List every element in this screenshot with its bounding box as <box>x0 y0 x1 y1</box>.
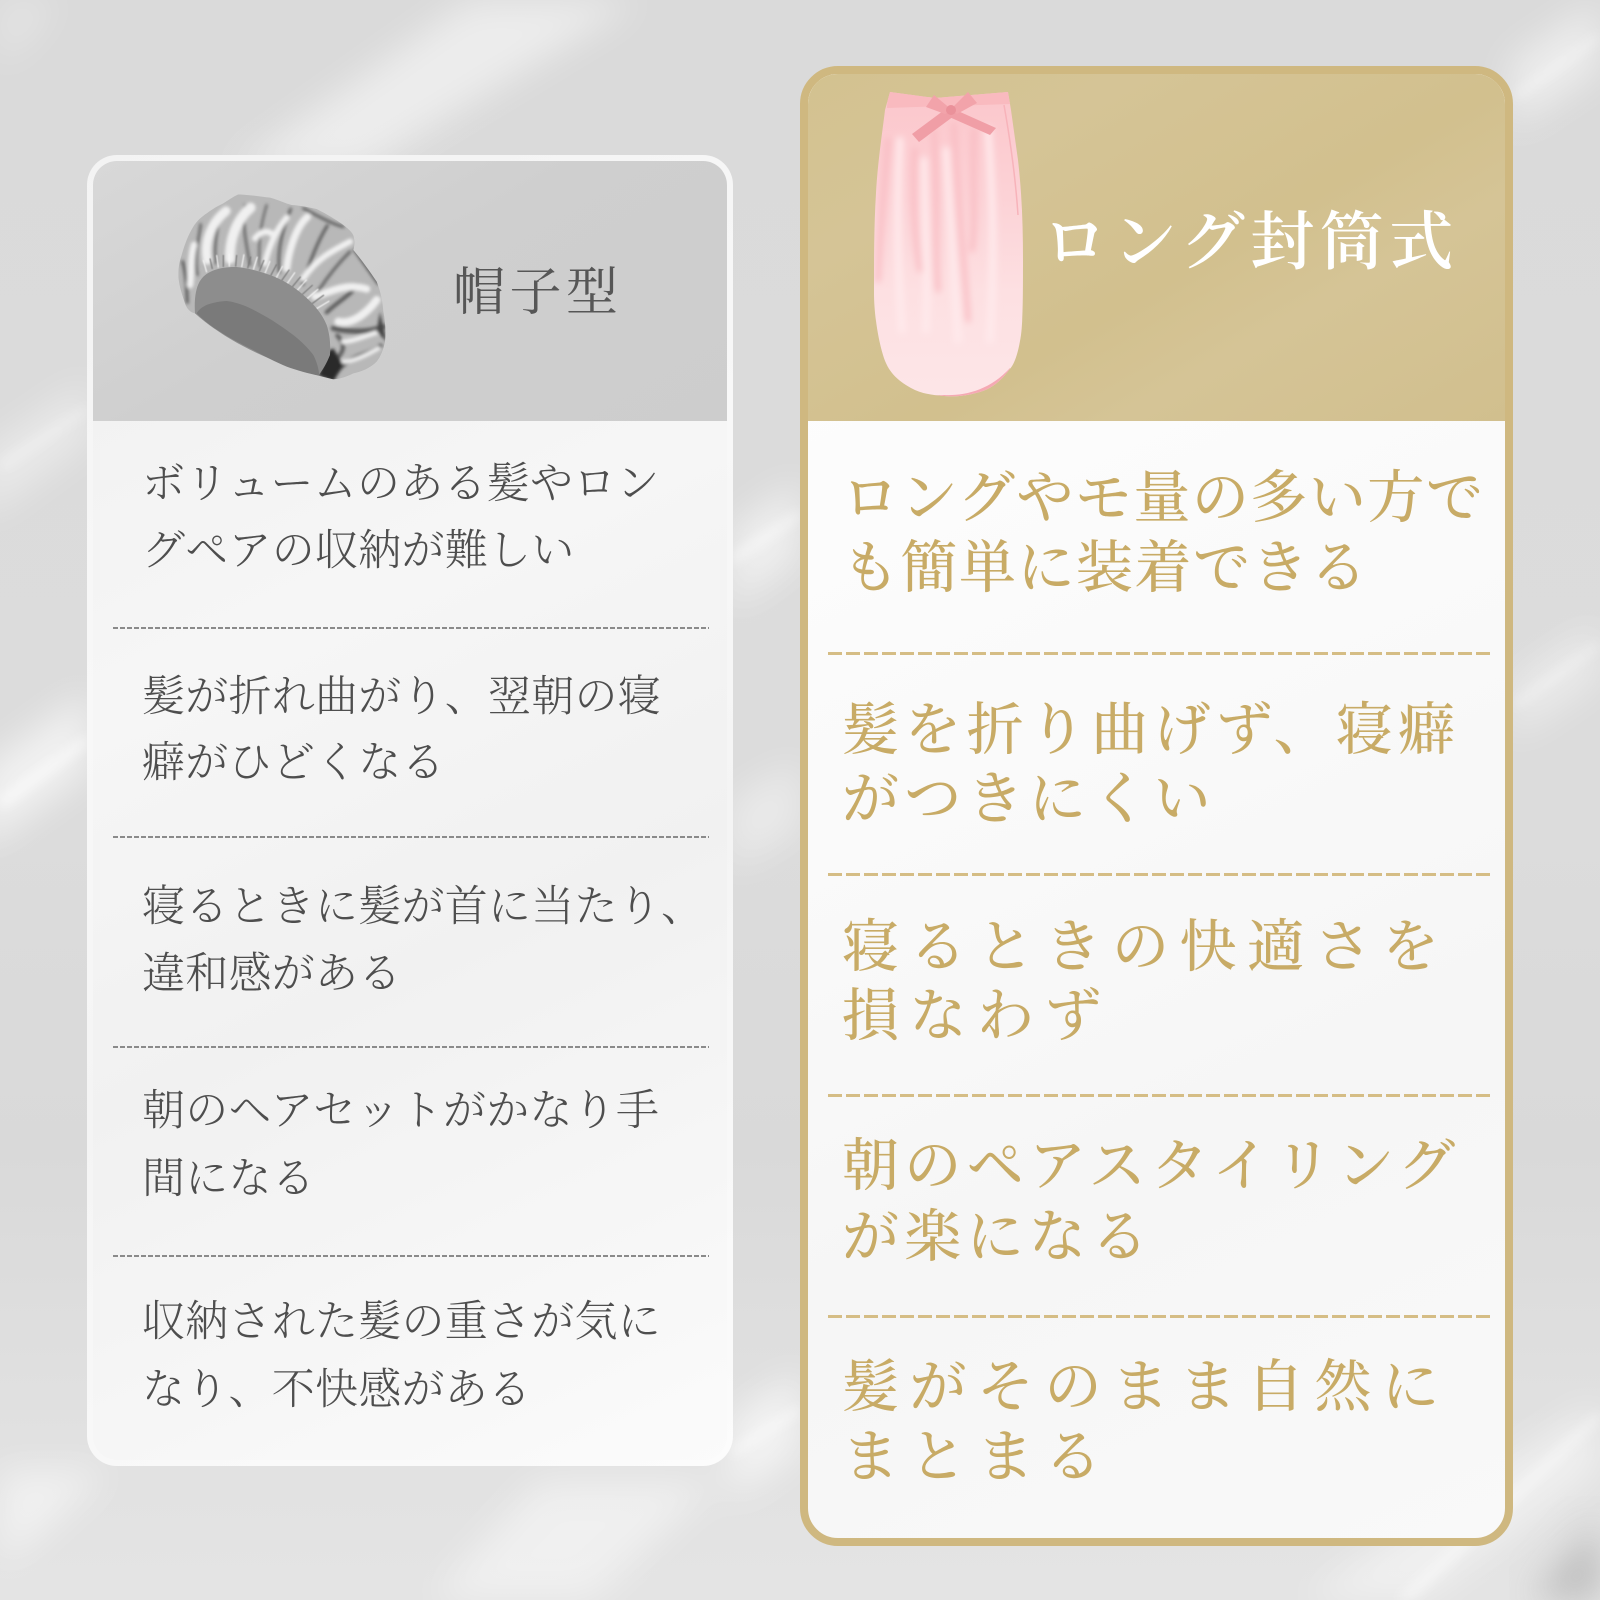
list item 3: 寝るときに髪が首に当たり、 <box>142 884 704 931</box>
list item 4: が楽になる <box>842 1206 1154 1269</box>
list item 5 <box>842 1356 1450 1489</box>
header band: hat type <box>93 161 727 421</box>
list item 5 <box>142 1299 661 1414</box>
list item 5: まとまる <box>842 1426 1112 1489</box>
list item 4 <box>842 1135 1460 1269</box>
icon: satin bonnet <box>178 194 386 380</box>
list item 5: 収納された髪の重さが気に <box>142 1299 661 1346</box>
list item 2 <box>142 674 661 787</box>
list item 2: 癖がひどくなる <box>142 740 445 787</box>
list item 4: 朝のペアスタイリング <box>842 1135 1460 1198</box>
list item 2: 髪を折り曲げず、寝癖 <box>842 699 1460 762</box>
list item 4: 間になる <box>142 1156 315 1203</box>
list item 1: グペアの収納が難しい <box>142 528 574 575</box>
list item 3 <box>142 884 704 998</box>
list item 2 <box>842 699 1460 831</box>
list item 1: ボリュームのある髪やロン <box>142 461 660 508</box>
list item 2: 髪が折れ曲がり、翌朝の寝 <box>142 674 661 721</box>
list item 3 <box>842 916 1450 1048</box>
panel: long envelope type (right column) <box>800 66 1513 1546</box>
list item 4 <box>142 1088 659 1203</box>
list item 2: がつきにくい <box>842 768 1216 831</box>
list item 4: 朝のヘアセットがかなり手 <box>142 1088 659 1135</box>
header band: long envelope type <box>808 74 1505 421</box>
list item 3: 違和感がある <box>142 951 402 998</box>
list item 5: 髪がそのまま自然に <box>842 1356 1450 1419</box>
list item 1: ロングやモ量の多い方で <box>842 467 1484 530</box>
heading: hat type: 帽子型 <box>453 265 623 322</box>
list item 3: 寝るときの快適さを <box>842 916 1450 979</box>
panel: hat type (left column) <box>87 155 733 1466</box>
list item 1: も簡単に装着できる <box>842 537 1368 600</box>
icon: pink satin envelope pouch <box>874 92 1023 396</box>
list item 5: なり、不快感がある <box>142 1367 531 1414</box>
list item 1 <box>842 467 1484 600</box>
list item 3: 損なわず <box>842 985 1112 1048</box>
list item 1 <box>142 461 660 575</box>
heading: long envelope type: ロング封筒式 <box>1043 207 1459 278</box>
